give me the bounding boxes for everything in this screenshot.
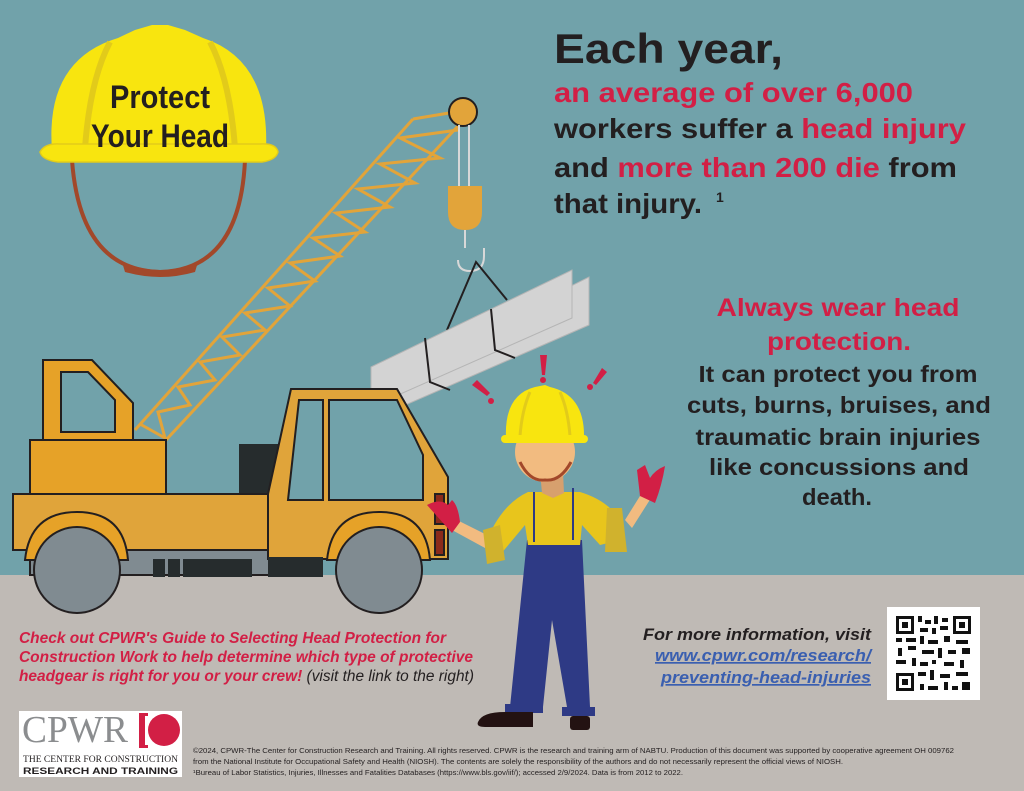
- background sky: [0, 0, 1024, 575]
- icon: pulley and hook: [447, 98, 507, 330]
- text block: CPWR guide callout: [19, 630, 474, 685]
- text block: more info link: www.cpwr.com/research/: [655, 646, 873, 665]
- gloves: [427, 500, 460, 533]
- steel beams: [371, 270, 589, 413]
- QR code: [887, 607, 980, 700]
- hat text: Protect: [110, 79, 210, 115]
- truck: [13, 360, 448, 613]
- neck and face: [540, 472, 564, 498]
- icon: big hard hat: Your Head: [91, 118, 229, 154]
- wheels: [25, 512, 128, 560]
- footer text: ©2024, CPWR-The Center for Construction Research and Training. All rights reserved. CPWR is the research and training arm of NABTU. Production of this document was supported by cooperative agreement OH 009762: [193, 746, 954, 755]
- headline text block: workers suffer a head injury: [553, 113, 966, 144]
- front cab: [268, 389, 448, 559]
- icon: big hard hat: [40, 25, 278, 277]
- headline text block: an average of over 6,000: [554, 77, 913, 108]
- text block: always wear head protection: traumatic brain injuries: [696, 424, 980, 450]
- shirt: [485, 492, 620, 555]
- text block: more info link: For more information, visit: [643, 625, 872, 644]
- legs: [510, 540, 590, 707]
- exclamation marks: [472, 355, 607, 404]
- headline text block: 1: [716, 189, 724, 205]
- text block: more info link: preventing-head-injuries: [660, 668, 871, 687]
- text block: always wear head protection: like concussions and: [709, 454, 969, 480]
- arms: [452, 520, 487, 548]
- text block: CPWR guide callout: Construction Work to help determine which type of protective: [19, 649, 473, 666]
- text block: always wear head protection: protection.: [767, 328, 911, 356]
- text block: CPWR guide callout: headgear is right for you or your crew! (visit the link to the right): [19, 668, 474, 685]
- logo: CPWR: RESEARCH AND TRAINING: [23, 766, 178, 776]
- footer text: from the National Institute for Occupational Safety and Health (NIOSH). The contents are solely the responsibility of the authors and do not necessarily represent the official views of NIOSH.: [193, 757, 843, 766]
- text block: always wear head protection: It can protect you from: [698, 361, 978, 387]
- logo: CPWR: [19, 709, 182, 777]
- text block: always wear head protection: cuts, burns, bruises, and: [687, 392, 991, 418]
- logo: CPWR: THE CENTER FOR CONSTRUCTION: [23, 755, 178, 765]
- crane boom: [135, 112, 458, 440]
- rear cab: [43, 360, 133, 440]
- worker: [427, 355, 665, 730]
- text block: more info link: [643, 625, 873, 687]
- text block: always wear head protection: [687, 294, 991, 510]
- text block: always wear head protection: death.: [802, 484, 872, 510]
- headline text block: that injury.: [554, 188, 702, 219]
- footer text: ¹Bureau of Labor Statistics, Injuries, Illnesses and Fatalities Databases (https://www.bls.gov/iif/); accessed 2/9/2024. Data is from 2012 to 2022.: [193, 768, 683, 777]
- footer text: [193, 746, 954, 777]
- headline text block: Each year,: [554, 25, 783, 72]
- text block: always wear head protection: Always wear head: [716, 294, 960, 322]
- headline text block: [553, 25, 966, 219]
- logo: CPWR: CPWR: [22, 709, 129, 751]
- headline text block: and more than 200 die from: [554, 152, 957, 183]
- text block: CPWR guide callout: Check out CPWR's Guide to Selecting Head Protection for: [19, 630, 447, 647]
- helmet: [506, 385, 584, 438]
- ground: [0, 575, 1024, 791]
